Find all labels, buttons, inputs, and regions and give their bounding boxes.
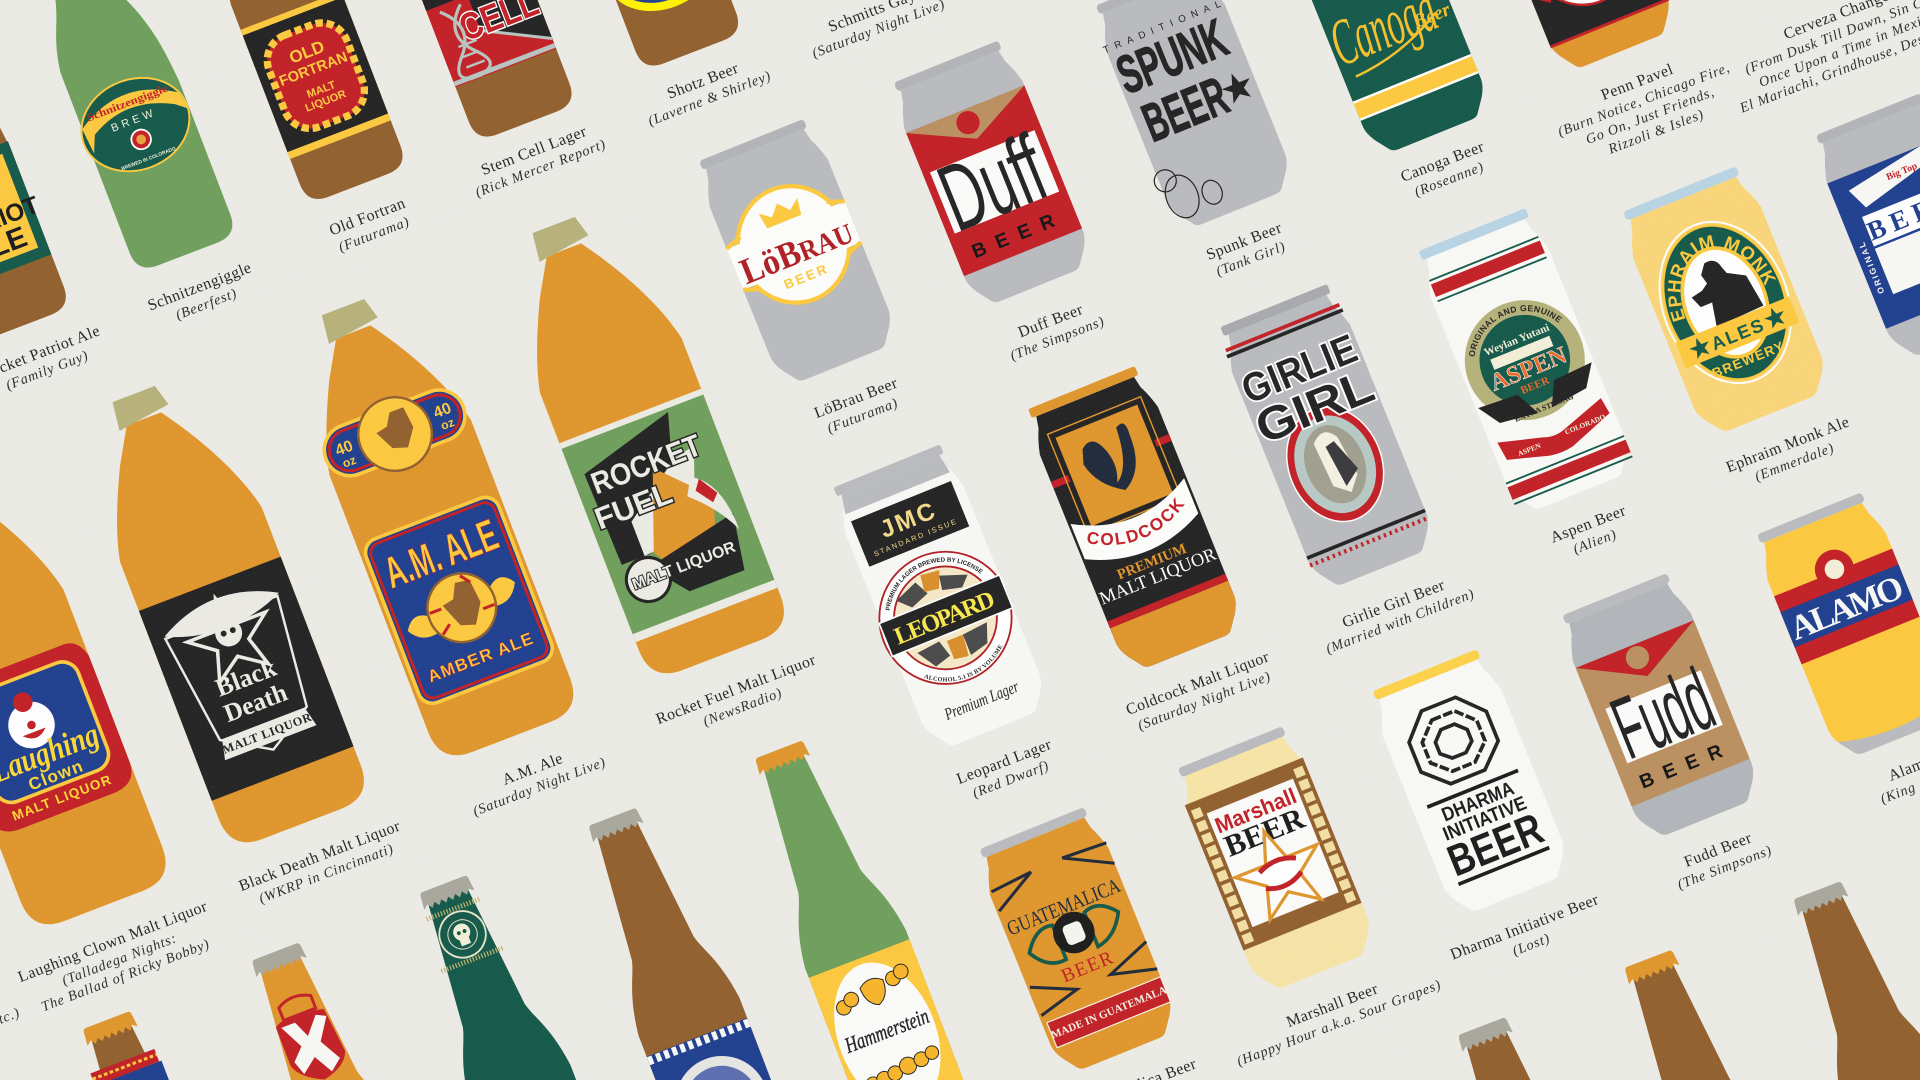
neck badge: 40 oz: oz <box>439 415 456 433</box>
caption: Canoga Beer: (Roseanne) <box>1412 159 1486 200</box>
caption: Aspen Beer <box>1548 502 1635 564</box>
caption: Stem Cell Lager: Stem Cell Lager <box>479 123 589 179</box>
bottle: brown crown silver (bottom right 1) <box>1431 1007 1707 1080</box>
caption: Spunk Beer: Spunk Beer <box>1204 219 1285 264</box>
label: LöBrau: LöBRAU <box>734 210 858 292</box>
bottle: brown with orange crown (lower left) <box>56 1001 332 1080</box>
badge <box>1464 300 1592 424</box>
text: premium malt liquor: PREMIUM <box>1115 541 1189 583</box>
caption: Rocket Patriot Ale: (Family Guy) <box>4 348 91 394</box>
can: Canoga Beer <box>1289 0 1494 158</box>
caption: Duff Beer: (The Simpsons) <box>1008 313 1107 364</box>
can: Aspen Beer <box>1420 208 1633 509</box>
ribbon: COLORADO <box>1563 412 1607 437</box>
label: blue panel <box>1827 136 1920 329</box>
title: Girlie Girl: GIRL <box>1248 359 1381 454</box>
bottle: brown crown orange (bottom right 2) <box>1598 939 1874 1080</box>
caption: Laughing Clown Malt Liquor: The Ballad of Ricky Bobby) <box>39 936 212 1015</box>
label: Marshall: BEER <box>1219 801 1310 864</box>
caption: Schnitzengiggle: (Beerfest) <box>174 285 239 324</box>
bottle: green Jekyll Island <box>393 865 669 1080</box>
label: Fudd: BEER <box>1636 736 1736 793</box>
caption: Duff Beer: Duff Beer <box>1016 301 1086 341</box>
caption: Shotz Beer: Shotz Beer <box>665 60 741 103</box>
leopard medallion: ALCOHOL 5.1 IS BY VOLUME <box>924 644 1002 682</box>
label: Stem Cell <box>406 0 556 87</box>
label: Rocket Fuel <box>559 389 777 642</box>
caption: Dharma Initiative Beer: (Lost) <box>1510 930 1552 959</box>
caption: Shotz Beer: (Laverne & Shirley) <box>646 68 774 130</box>
caption: Ephraim Monk Ale: Ephraim Monk Ale <box>1724 414 1852 476</box>
can: Fudd Beer <box>1556 570 1764 843</box>
band: Alamo: ALAMO <box>1785 568 1910 648</box>
bottle: Schnitzengiggle <box>0 0 238 275</box>
label: Laughing Clown <box>0 638 138 838</box>
label: black panel <box>1489 0 1669 48</box>
banner: Coldcock: COLDCOCK <box>1088 497 1185 546</box>
ribbon: ASPEN <box>1516 441 1543 458</box>
leopard medallion: LEOPARD <box>890 585 1000 650</box>
caption: LöBrau Beer: (Futurama) <box>825 395 901 437</box>
stripes <box>1424 234 1633 505</box>
caption: A.M. Ale: A.M. Ale <box>500 750 566 789</box>
label: Rocket Fuel: ROCKET <box>586 428 706 501</box>
caption: Aspen Beer: Aspen Beer <box>1548 502 1629 547</box>
label: lion <box>647 1018 800 1080</box>
neck badge: 40 oz <box>313 373 477 495</box>
silver shoulder <box>838 454 950 514</box>
caption: Coldcock Malt Liquor: (Saturday Night Live) <box>1136 668 1273 734</box>
label: Marshall: Marshall <box>1211 783 1300 838</box>
label: Duff: Duff <box>925 115 1061 252</box>
label: Marshall <box>1185 757 1362 951</box>
can: Spunk Beer <box>1084 0 1300 235</box>
bottle: Hammerstein <box>728 730 1005 1080</box>
bottle: Old Fortran <box>136 0 408 205</box>
title: Girlie Girl <box>1234 324 1381 454</box>
leopard medallion: PREMIUM LAGER BREWED BY LICENSE <box>886 557 983 610</box>
can: Alamo Beer <box>1750 490 1920 762</box>
label: Rocket Fuel: FUEL <box>590 476 677 537</box>
mask and eye: BEER <box>1058 947 1117 987</box>
bottle: brown crown silver (bottom right 3) <box>1767 871 1920 1080</box>
label: Old Fortran Malt Liquor: MALT <box>305 79 338 101</box>
caption: Aspen Beer: (Alien) <box>1571 526 1619 558</box>
badge: Weylan Yutani <box>1482 322 1551 359</box>
stripes <box>1223 302 1428 566</box>
label: LöBrau: BEER <box>782 261 831 292</box>
badge: BEER <box>1519 374 1552 397</box>
can: Marshall Beer <box>1171 723 1380 996</box>
band: Alamo <box>1766 528 1920 664</box>
text: Dharma Initiative Beer <box>1427 769 1550 886</box>
cap <box>529 215 591 262</box>
label: Schnitzengiggle Brew <box>68 62 204 187</box>
label: Old Fortran Malt Liquor: FORTRAN <box>277 49 350 90</box>
caption: Penn Pavel <box>1549 42 1745 172</box>
bottle: orange with red shield <box>225 932 501 1080</box>
icon: shield and crown <box>268 987 352 1080</box>
label: Old Fortran Malt Liquor <box>241 0 391 159</box>
caption: Fudd Beer <box>1668 824 1774 893</box>
neck badge: 40 oz: 40 <box>431 400 454 422</box>
label: Rocket Patriot <box>0 139 56 293</box>
text: Dharma Initiative Beer: INITIATIVE <box>1440 792 1530 846</box>
cap <box>318 297 380 344</box>
cap <box>109 384 171 431</box>
caption: Spunk Beer: (Tank Girl) <box>1214 239 1288 280</box>
caption: Canoga Beer: Canoga Beer <box>1398 138 1487 186</box>
label: Duff <box>906 85 1082 276</box>
can: Penn Pavel <box>1475 0 1680 75</box>
label: blue panel: Big Top <box>1885 160 1919 183</box>
label: Fudd: Fudd <box>1599 649 1727 778</box>
leopard medallion <box>878 550 1014 685</box>
can: Duff Beer <box>887 38 1096 310</box>
JMC panel <box>851 481 969 567</box>
caption: Coldcock Malt Liquor: Coldcock Malt Liquor <box>1124 648 1272 719</box>
label: Schnitzengiggle Brew: BREW <box>110 106 158 135</box>
bottle: Laughing Clown Malt Liquor <box>0 473 174 933</box>
caption: Marshall Beer: (Happy Hour a.k.a. Sour Grapes) <box>1235 977 1444 1070</box>
title: Girlie Girl: GIRLIE <box>1235 325 1363 412</box>
neck label <box>88 1048 179 1080</box>
caption: Penn Pavel: Rizzoli & Isles) <box>1605 106 1706 158</box>
caption: Penn Pavel: Go On, Just Friends, <box>1584 84 1717 148</box>
caption: LöBrau Beer <box>812 375 907 439</box>
badge: ORIGINAL AND GENUINE <box>1469 305 1562 356</box>
caption: Leopard Lager: Leopard Lager <box>954 736 1054 788</box>
caption: Ephraim Monk Ale: (Emmerdale) <box>1753 440 1837 485</box>
caption: Duff Beer <box>1001 295 1107 364</box>
can: Big Top <box>1809 90 1920 363</box>
text: Guatemalica: GUATEMALICA <box>1003 873 1124 940</box>
caption: Old Fortran <box>327 195 414 257</box>
label: Canoga <box>1317 0 1479 121</box>
script: Premium Lager: Premium Lager <box>941 677 1022 724</box>
label: Rocket Fuel: MALT LIQUOR <box>630 539 739 594</box>
bottle: Shotz Beer <box>469 0 746 72</box>
caption: Rocket Fuel Malt Liquor: (NewsRadio) <box>701 685 785 730</box>
label: Traditional Spunk Beer <box>1102 0 1269 158</box>
can: Girlie Girl Beer <box>1215 282 1439 593</box>
badge: ASPEN <box>1486 341 1571 397</box>
caption: Spunk Beer <box>1204 219 1291 281</box>
neck label: skull <box>422 897 503 971</box>
emblem <box>1047 397 1181 534</box>
JMC panel: STANDARD ISSUE <box>872 516 959 558</box>
can: Guatemalica Beer <box>973 804 1182 1077</box>
label: LöBrau <box>712 166 875 323</box>
label: Black Death: Death <box>220 677 291 728</box>
bubbles <box>1151 152 1227 225</box>
caption: Black Death Malt Liquor: Black Death Malt Liquor <box>237 818 403 895</box>
caption: Laughing Clown Malt Liquor: (Talladega Nights: <box>60 930 179 989</box>
label: blue panel: ORIGINAL <box>1856 239 1886 295</box>
label: Black Death: MALT LIQUOR <box>220 710 314 757</box>
stripes <box>1051 434 1228 628</box>
medallion <box>1270 392 1400 536</box>
caption: Leopard Lager: (Red Dwarf) <box>970 758 1052 802</box>
caption: Old Fortran: Old Fortran <box>327 195 408 239</box>
can: Ephraim Monk Ale <box>1624 167 1823 431</box>
label: Traditional Spunk Beer: BEER <box>1134 66 1236 154</box>
base band <box>1110 581 1247 675</box>
caption: Old Fortran: (Futurama) <box>336 214 412 256</box>
caption: Marshall Beer: Marshall Beer <box>1284 980 1381 1031</box>
main label: Amber Ale: AMBER ALE <box>425 628 537 686</box>
label: Laughing Clown: MALT LIQUOR <box>10 772 114 824</box>
bottle: Rocket Patriot Ale <box>0 0 77 346</box>
neck badge: 40 oz: 40 <box>333 438 356 460</box>
caption: Laughing Clown Malt Liquor <box>16 898 223 1019</box>
badge: ALES <box>1708 314 1768 354</box>
main label: Amber Ale: A.M. ALE <box>378 510 505 598</box>
caption: Penn Pavel: Penn Pavel <box>1599 61 1676 104</box>
label: Fudd <box>1576 620 1750 807</box>
can: Dharma Initiative Beer <box>1366 646 1575 919</box>
label: Hammerstein <box>809 939 975 1080</box>
bottle: brown with lion label <box>562 797 838 1080</box>
caption: Laughing Clown Malt Liquor: Laughing Clown Malt Liquor <box>16 898 210 986</box>
mask and eye <box>1021 895 1137 995</box>
can: Leopard Lager <box>834 445 1041 745</box>
label: Canoga: Beer <box>1409 0 1454 33</box>
caption: Schnitzengiggle: Schnitzengiggle <box>145 259 254 315</box>
label: Duff: BEER <box>969 206 1068 263</box>
label: Laughing Clown: Clown <box>25 755 86 794</box>
banner: Coldcock <box>1070 478 1198 560</box>
bottle: Black Death Malt Liquor <box>66 366 373 851</box>
bottle: Stem Cell Lager <box>305 0 577 142</box>
caption: Canoga Beer <box>1398 138 1493 203</box>
caption: Penn Pavel: (Burn Notice, Chicago Fire, <box>1556 60 1732 140</box>
badge: EXTRA STRONG <box>1513 392 1575 424</box>
caption: Girlie Girl Beer: (Married with Children) <box>1324 586 1477 657</box>
zigzags <box>990 841 1157 1016</box>
caption: Fudd Beer: Fudd Beer <box>1682 829 1755 871</box>
main label: Amber Ale <box>361 493 557 708</box>
label: Schnitzengiggle Brew: Schnitzengiggle <box>85 82 170 124</box>
bottle: A.M. Ale <box>275 279 582 764</box>
badge: BREWERY <box>1710 338 1787 381</box>
base <box>1831 689 1920 762</box>
label: Black Death <box>139 557 354 801</box>
badge: EPHRAIM MONK <box>1668 235 1776 322</box>
caption: Rocket Fuel Malt Liquor: Rocket Fuel Malt Liquor <box>654 651 819 728</box>
text: Dharma Initiative Beer: DHARMA <box>1439 778 1517 826</box>
caption: Girlie Girl Beer: Girlie Girl Beer <box>1340 577 1448 631</box>
caption: A.M. Ale: (Saturday Night Live) <box>471 754 608 820</box>
label: Old Fortran Malt Liquor: LIQUOR <box>304 88 348 115</box>
label: Black Death: Black <box>211 653 281 702</box>
caption: Dharma Initiative Beer: Dharma Initiative Beer <box>1448 891 1601 963</box>
caption: Black Death Malt Liquor: (WKRP in Cincinnati) <box>257 841 396 907</box>
can: Coldcock Malt Liquor <box>1028 366 1236 667</box>
neck badge: 40 oz: oz <box>340 453 358 471</box>
caption: Stem Cell Lager: (Rick Mercer Report) <box>473 136 608 201</box>
bottle: Rocket Fuel Malt Liquor <box>486 197 793 682</box>
JMC panel: JMC <box>876 497 941 544</box>
label: Shotz <box>593 0 729 26</box>
band: Made in Guatemala: MADE IN GUATEMALA <box>1050 984 1168 1042</box>
text: premium malt liquor: MALT LIQUOR <box>1096 543 1220 609</box>
can: LöBrau Beer <box>692 116 901 389</box>
ribbon <box>1496 397 1616 473</box>
text: Dharma Initiative Beer: BEER <box>1441 804 1550 886</box>
caption: LöBrau Beer: LöBrau Beer <box>812 375 900 422</box>
label: Old Fortran Malt Liquor: OLD <box>286 36 327 68</box>
label: Schnitzengiggle Brew: BREWED IN COLORADO <box>121 146 177 172</box>
badge <box>1658 220 1800 384</box>
caption: Fudd Beer: (The Simpsons) <box>1675 842 1774 893</box>
caption: Alamo Beer <box>1871 734 1920 807</box>
icon: Dharma octagon <box>1400 689 1506 792</box>
label: Hammerstein: Hammerstein <box>840 1003 932 1058</box>
